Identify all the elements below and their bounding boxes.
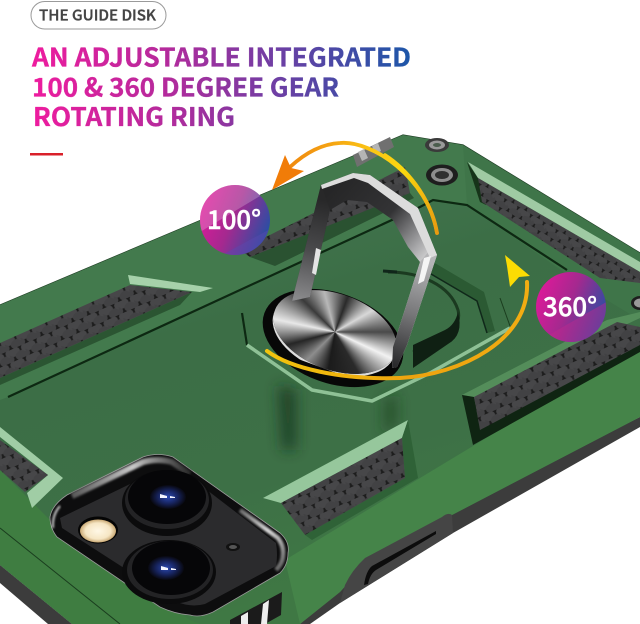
upper rim band — [0, 135, 470, 400]
phone case — [0, 135, 640, 624]
tag: the guide disk — [31, 2, 166, 29]
ring left highlight — [312, 248, 321, 275]
bezel left highlight — [53, 506, 60, 528]
badge: 360 degrees: 360° — [543, 287, 597, 324]
strip: left grip — [0, 275, 213, 385]
ring top highlight — [321, 173, 437, 258]
lower right rim band — [285, 345, 640, 624]
case body — [0, 135, 640, 624]
case side edge — [0, 417, 640, 624]
top lens — [122, 470, 212, 536]
title: ROTATING RING — [33, 97, 235, 134]
case top edge line — [0, 135, 640, 305]
screw top — [425, 138, 449, 152]
camera module — [50, 454, 288, 616]
title — [31, 38, 411, 134]
folding ring — [292, 173, 437, 368]
camera plate — [60, 472, 277, 605]
strip: lower right grip — [462, 312, 640, 445]
light green trim — [247, 328, 510, 401]
tag: the guide disk: THE GUIDE DISK — [39, 4, 156, 26]
title: AN ADJUSTABLE INTEGRATED — [31, 38, 411, 74]
bezel top highlight — [72, 460, 190, 496]
strip: upper right grip — [467, 162, 640, 283]
strip: lower left grip — [0, 427, 63, 508]
top arrow front segment — [385, 155, 437, 233]
ring right highlight — [418, 256, 431, 284]
red accent line — [30, 153, 63, 156]
ring recess — [249, 271, 460, 405]
volume buttons — [353, 137, 394, 167]
strip: upper left grip — [240, 167, 414, 266]
icon: orange arrow head — [272, 155, 304, 190]
bottom rotation arrow — [267, 282, 527, 378]
microphone — [226, 543, 240, 551]
strip: bottom grip — [263, 420, 418, 540]
bottom left rim band — [0, 470, 200, 624]
right notch line — [500, 298, 510, 326]
screw right — [631, 296, 640, 310]
bottom lens — [122, 540, 216, 604]
metal disc — [262, 274, 408, 390]
shadow below mount — [278, 385, 396, 450]
title: 100 & 360 DEGREE GEAR — [32, 68, 339, 105]
lower left groove — [0, 528, 120, 624]
badge: 100 degrees — [200, 185, 270, 255]
panel groove line — [8, 200, 567, 397]
badge: 360 degrees — [536, 272, 610, 345]
right rim band — [463, 145, 640, 320]
ring face — [292, 173, 437, 368]
bezel right highlight — [240, 510, 283, 570]
flash — [78, 516, 118, 544]
ring left leg — [292, 185, 330, 301]
octagon raised band — [431, 262, 495, 333]
octagon band shadow — [431, 274, 487, 333]
bottom connector keys — [230, 592, 282, 624]
octagon left edge — [242, 313, 247, 345]
ring right leg — [392, 250, 437, 368]
camera bezel — [50, 454, 288, 616]
top arrow tail behind ring — [290, 143, 437, 233]
icon: yellow arrow head — [505, 255, 530, 287]
side button — [340, 514, 453, 603]
screw lower — [426, 164, 458, 186]
badge: 100 degrees: 100° — [207, 200, 261, 237]
